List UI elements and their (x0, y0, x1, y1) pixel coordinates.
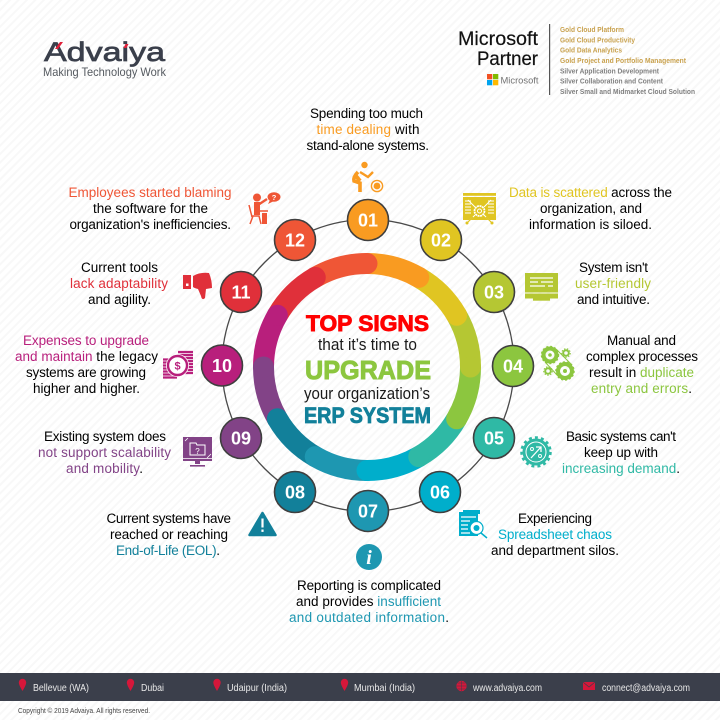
text 11: Current tools (81, 260, 158, 275)
competency list: Gold Cloud Platform (560, 25, 624, 34)
competency list: Gold Data Analytics (560, 46, 622, 54)
badge 04 (492, 346, 534, 386)
text 03: System isn't (579, 260, 648, 275)
footer: web and email: connect@advaiya.com (602, 683, 690, 694)
text 05: Basic systems can't (566, 429, 676, 444)
footer: locations: Dubai (141, 683, 164, 694)
badge 11 (220, 272, 262, 312)
text 08 (106, 511, 231, 558)
text 03 (575, 260, 651, 307)
sign 05 (474, 418, 680, 476)
Microsoft Partner badge: Partner (477, 48, 538, 70)
text 11 (70, 260, 168, 307)
sign 10 (15, 333, 242, 396)
sign 04 (492, 333, 698, 396)
text 05 (562, 429, 680, 476)
text 07: Reporting is complicated (297, 578, 441, 593)
competency list: Silver Application Development (560, 66, 659, 76)
sign 09 (38, 418, 262, 476)
icon: gear with percent arrow (522, 438, 550, 466)
text 10: Expenses to upgrade (23, 333, 149, 348)
text 11: lack adaptability (70, 276, 168, 291)
competency list: Gold Project and Portfolio Management (560, 56, 686, 65)
icon: monitor with folder: ? (195, 447, 200, 456)
text 04 (586, 333, 698, 396)
footer: web and email: www.advaiya.com (472, 683, 542, 694)
icon: data window with gear (463, 193, 496, 224)
title: centre of ring: UPGRADE (305, 357, 431, 385)
badge 09 (220, 418, 262, 458)
badge 02: 02 (431, 230, 451, 250)
text 03: and intuitive. (577, 292, 650, 307)
badge 06 (420, 472, 460, 512)
icon: coins (163, 352, 193, 378)
badge 05: 05 (484, 428, 504, 448)
badge 10: 10 (212, 356, 232, 376)
text 09: and mobility. (66, 461, 143, 476)
text 07 (289, 578, 449, 625)
text 11: and agility. (88, 292, 151, 307)
badge 01: 01 (358, 210, 378, 230)
text 05: increasing demand. (562, 461, 680, 476)
competency list: Silver Small and Midmarket Cloud Solution (560, 87, 695, 96)
icon: coins: $ (174, 360, 181, 372)
colour ring (253, 253, 481, 481)
text 06 (491, 511, 619, 558)
logo: Advaiya: Advaiya (44, 37, 166, 67)
text 04: entry and errors. (591, 381, 692, 396)
text 03: user-friendly (575, 276, 651, 291)
text 04: complex processes (586, 349, 698, 364)
text 01 (306, 106, 429, 153)
text 01: stand-alone systems. (306, 138, 429, 153)
text 12 (68, 185, 232, 232)
badge 12: 12 (285, 230, 305, 250)
text 10: higher and higher. (33, 381, 140, 396)
text 02 (509, 185, 672, 232)
logo: Advaiya (43, 37, 167, 79)
icon: information: i (366, 547, 372, 569)
title: centre of ring: that it’s time to (318, 336, 417, 354)
icon: person with question bubble (249, 192, 280, 224)
title: centre of ring: ERP SYSTEM (304, 403, 431, 428)
text 06: Spreadsheet chaos (498, 527, 612, 542)
badge 06: 06 (430, 482, 450, 502)
text 08: Current systems have (106, 511, 231, 526)
icon: person at desk with clock (354, 162, 383, 192)
sign 08 (106, 472, 316, 558)
text 12: organization's inefficiencies. (70, 217, 231, 232)
text 07: and outdated information. (289, 610, 449, 625)
badge 12 (274, 220, 316, 260)
sign 03 (474, 260, 651, 312)
title: centre of ring (304, 311, 431, 428)
Microsoft Partner badge: Microsoft (500, 76, 539, 86)
text 04: Manual and (607, 333, 676, 348)
icon: gears (542, 346, 574, 380)
badge 07 (348, 490, 388, 532)
competency list (560, 25, 695, 96)
text 06: and department silos. (491, 543, 619, 558)
text 10: and maintain the legacy (15, 349, 158, 364)
badge 07: 07 (358, 502, 378, 522)
text 10 (15, 333, 158, 396)
text 12: the software for the (93, 201, 208, 216)
text 12: Employees started blaming (68, 185, 232, 200)
footer: locations: Bellevue (WA) (33, 683, 89, 694)
badge 09: 09 (231, 428, 251, 448)
text 02: organization, and (540, 201, 642, 216)
sign 07 (289, 490, 449, 625)
text 06: Experiencing (518, 511, 592, 526)
text 01: Spending too much (310, 106, 423, 121)
badge 03 (474, 272, 514, 312)
badge 11: 11 (231, 282, 251, 302)
badge 08 (274, 472, 316, 512)
footer: locations (19, 679, 415, 694)
text 10: systems are growing (26, 365, 146, 380)
footer: locations: Udaipur (India) (227, 683, 287, 694)
text 08: reached or reaching (110, 527, 228, 542)
sign 06 (420, 472, 619, 558)
footer: locations: Mumbai (India) (354, 683, 415, 694)
text 02: Data is scattered across the (509, 185, 672, 200)
orbit line (222, 220, 514, 512)
text 08: End-of-Life (EOL). (116, 543, 220, 558)
text 09: not support scalability (38, 445, 171, 460)
footer: web and email (456, 681, 690, 694)
title: centre of ring: your organization’s (304, 385, 430, 403)
text 05: keep up with (584, 445, 658, 460)
sign 02 (420, 185, 672, 260)
icon: monitor with folder (183, 437, 212, 467)
icon: person with question bubble: ? (272, 193, 277, 202)
sign 12 (68, 185, 316, 260)
icon: monitor (525, 273, 558, 301)
badge 02 (420, 220, 462, 260)
text 04: result in duplicate (589, 365, 694, 380)
text 09: Existing system does (44, 429, 166, 444)
text 02: information is siloed. (529, 217, 652, 232)
Microsoft Partner badge: Microsoft (458, 28, 539, 50)
badge 10 (202, 345, 242, 386)
Microsoft Partner badge (458, 24, 550, 95)
icon: warning triangle (250, 513, 276, 535)
icon: thumbs down (183, 273, 212, 299)
sign 01 (306, 106, 429, 240)
competency list: Gold Cloud Productivity (560, 36, 636, 44)
badge 03: 03 (484, 282, 504, 302)
title: centre of ring: TOP SIGNS (306, 311, 429, 336)
badge 08: 08 (285, 482, 305, 502)
logo: Advaiya: Making Technology Work (43, 65, 167, 79)
text 09 (38, 429, 171, 476)
icon: information (356, 544, 382, 570)
competency list: Silver Collaboration and Content (560, 76, 663, 86)
footer bar (0, 673, 720, 701)
sign 11 (70, 260, 262, 312)
icon: spreadsheet and magnifier (459, 510, 487, 538)
text 01: time dealing with (316, 122, 420, 137)
badge 04: 04 (503, 356, 523, 376)
copyright: Copyright © 2019 Advaiya. All rights reserved. (18, 707, 150, 715)
text 07: and provides insufficient (296, 594, 441, 609)
badge 05 (474, 418, 514, 458)
